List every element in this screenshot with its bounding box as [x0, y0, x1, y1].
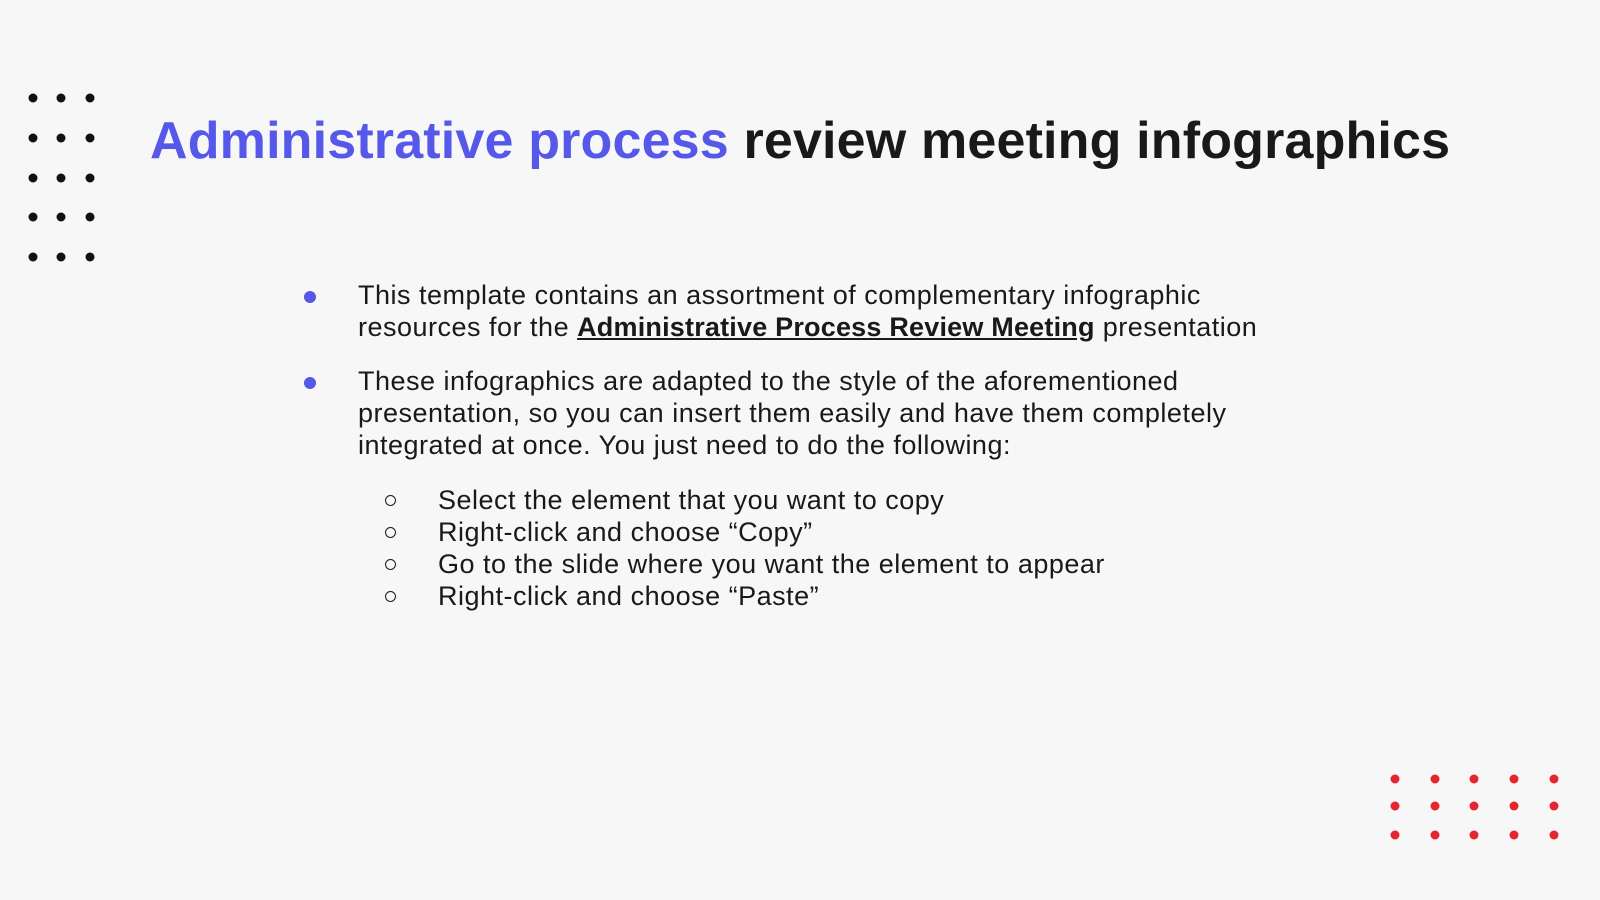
decorative dots: black grid	[28, 94, 94, 262]
sub-steps: Go to the slide where you want the element to appear	[438, 549, 1105, 579]
decorative dots: red grid	[1390, 774, 1558, 840]
bullet list	[304, 280, 1257, 611]
bullet 2	[304, 366, 1226, 460]
sub-steps: Right-click and choose “Paste”	[438, 581, 819, 611]
sub-steps: Right-click and choose “Copy”	[438, 517, 813, 547]
sub-steps	[385, 485, 1105, 611]
title: Administrative process review meeting infographics	[150, 112, 1450, 170]
bullet 2: integrated at once. You just need to do the following:	[358, 430, 1011, 460]
bullet 2: These infographics are adapted to the style of the aforementioned	[358, 366, 1179, 396]
bullet 2: presentation, so you can insert them easily and have them completely	[358, 398, 1226, 428]
bullet 1	[304, 280, 1257, 342]
bullet 1: This template contains an assortment of complementary infographic	[358, 280, 1201, 310]
sub-steps: Select the element that you want to copy	[438, 485, 944, 515]
bullet 1: resources for the Administrative Process Review Meeting presentation	[358, 312, 1257, 342]
